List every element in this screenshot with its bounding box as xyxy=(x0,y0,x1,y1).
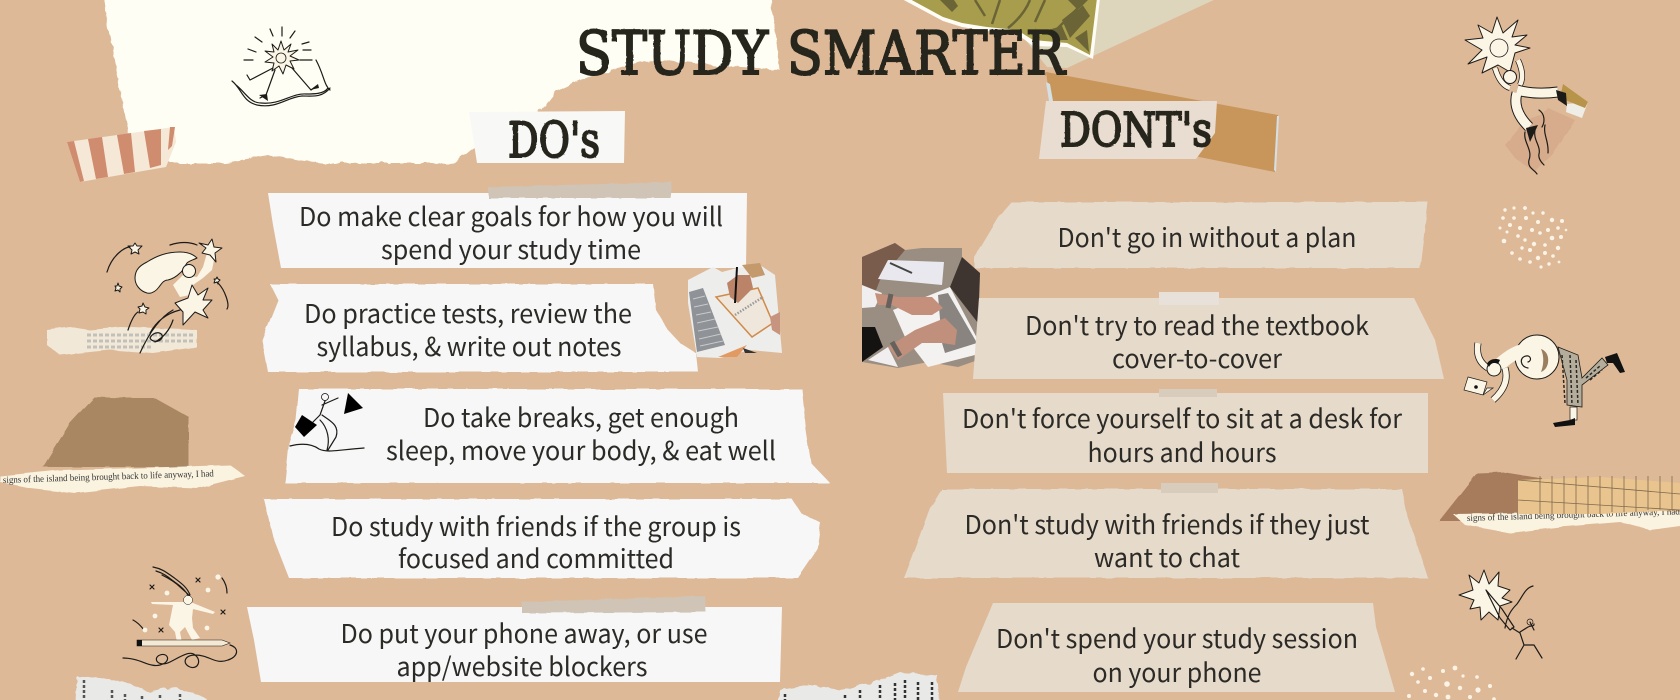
top olive leaf paper collage xyxy=(900,0,1218,68)
panel: dont item 1: Don't go in without a plan xyxy=(1058,218,1356,255)
illustration: figure surfing on pencil xyxy=(123,567,237,668)
title: SMARTER xyxy=(787,19,1067,89)
grid paper and brown scrap right xyxy=(1439,472,1680,533)
panel: dont item 3 xyxy=(943,389,1428,473)
panel: do item 1: Do make clear goals for how you will xyxy=(299,197,723,234)
torn paper strip behind star rider xyxy=(47,327,197,355)
illustration: figure carrying black shapes xyxy=(290,393,364,451)
tape on fifth item xyxy=(522,596,706,613)
panel: do item 3: Do take breaks, get enough xyxy=(423,398,739,435)
panel: do item 3 xyxy=(285,389,830,483)
panel: do item 5 xyxy=(247,607,782,684)
panel: do item 2 xyxy=(262,284,698,372)
panel: dont item 2: Don't try to read the textbook xyxy=(1025,306,1370,343)
newspaper scrap bottom left xyxy=(75,676,206,700)
panel: dont item 5: Don't spend your study session xyxy=(996,619,1358,656)
panel: dont item 3: Don't force yourself to sit at a desk for xyxy=(962,399,1403,436)
panel: dont item 2: cover-to-cover xyxy=(1112,339,1283,376)
torn book text strip xyxy=(0,465,245,493)
illustration: sun figure xyxy=(232,27,330,106)
illustration: star rider figure xyxy=(107,239,228,353)
panel: dont item 4: want to chat xyxy=(1094,538,1240,575)
decoration: dots cluster upper right xyxy=(1498,206,1567,269)
panel: dont item 1 xyxy=(974,202,1428,268)
title xyxy=(576,19,1067,89)
brown kraft tape behind DONT's xyxy=(1046,72,1279,172)
DO's heading: DO's xyxy=(508,112,600,169)
illustration: figure holding sun with gold tape xyxy=(1465,17,1588,174)
DONT's heading: DONT's xyxy=(1060,103,1212,158)
illustration: starburst and figure with pencil xyxy=(1459,570,1542,659)
photo: hands typing on a laptop xyxy=(862,243,980,368)
panel: dont item 3: hours and hours xyxy=(1088,433,1276,470)
panel: dont item 5 xyxy=(958,603,1395,692)
panel: do item 5: Do put your phone away, or use xyxy=(340,614,708,651)
small tape on dont item 2 xyxy=(1159,292,1219,305)
panel: dont item 2 xyxy=(973,298,1444,379)
panel: dont item 4 xyxy=(904,483,1428,578)
tape on first item xyxy=(488,182,672,198)
panel: do item 2: Do practice tests, review the xyxy=(304,294,632,331)
title: STUDY xyxy=(576,19,769,89)
panel: do item 1 xyxy=(268,193,747,268)
panel: dont item 5: on your phone xyxy=(1092,653,1262,690)
panel: do item 4: Do study with friends if the group is xyxy=(331,507,741,544)
decoration: dots cluster lower right xyxy=(1407,666,1496,700)
torn book text strip: signs of the island being brought back to life anyway, I had xyxy=(3,468,214,486)
illustration: running figure with spiral xyxy=(1464,335,1625,427)
panel: do item 4: focused and committed xyxy=(398,539,674,576)
torn cream paper xyxy=(102,0,780,163)
panel: do item 5: app/website blockers xyxy=(396,647,648,684)
photo: writing in notebook by laptop xyxy=(688,263,782,358)
panel: do item 2: syllabus, & write out notes xyxy=(316,327,622,364)
panel: do item 4 xyxy=(264,499,821,578)
newspaper scrap bottom middle xyxy=(777,672,939,700)
panel: do item 3: sleep, move your body, & eat well xyxy=(386,431,776,468)
panel: do item 1: spend your study time xyxy=(381,230,641,267)
striped washi tape xyxy=(67,127,176,182)
panel: dont item 4: Don't study with friends if they just xyxy=(964,505,1370,542)
brown torn paper xyxy=(43,397,189,467)
